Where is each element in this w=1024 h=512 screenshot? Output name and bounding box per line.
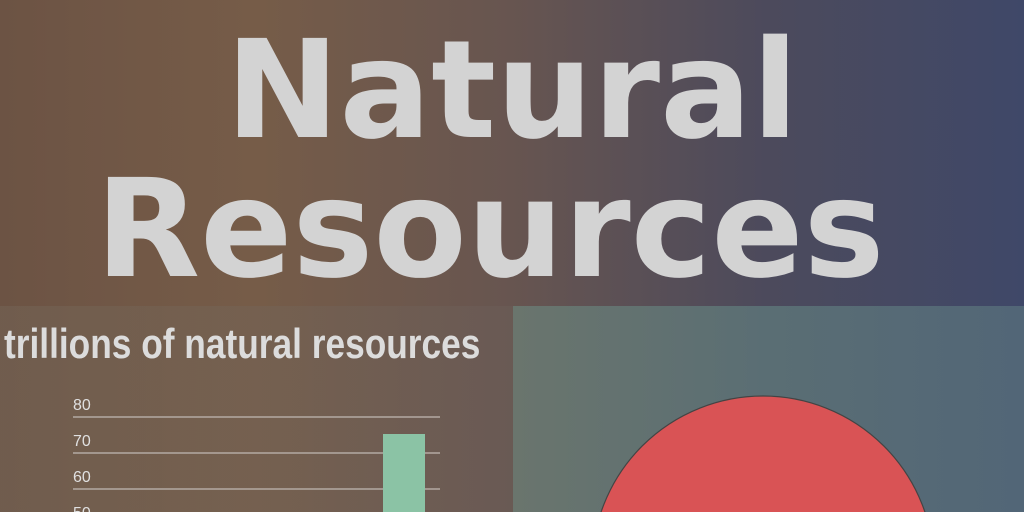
bar chart [73,397,440,512]
panel: pie chart [513,306,1024,512]
bar chart: 70 [73,433,91,450]
title: Resources [95,151,885,309]
bar chart: 60 [73,469,91,486]
chart heading: trillions of natural resources [4,320,480,367]
title [95,12,885,309]
bar chart: 80 [73,397,91,414]
pie [600,395,926,512]
panel: bar chart [0,306,513,512]
title: Natural [226,12,798,170]
